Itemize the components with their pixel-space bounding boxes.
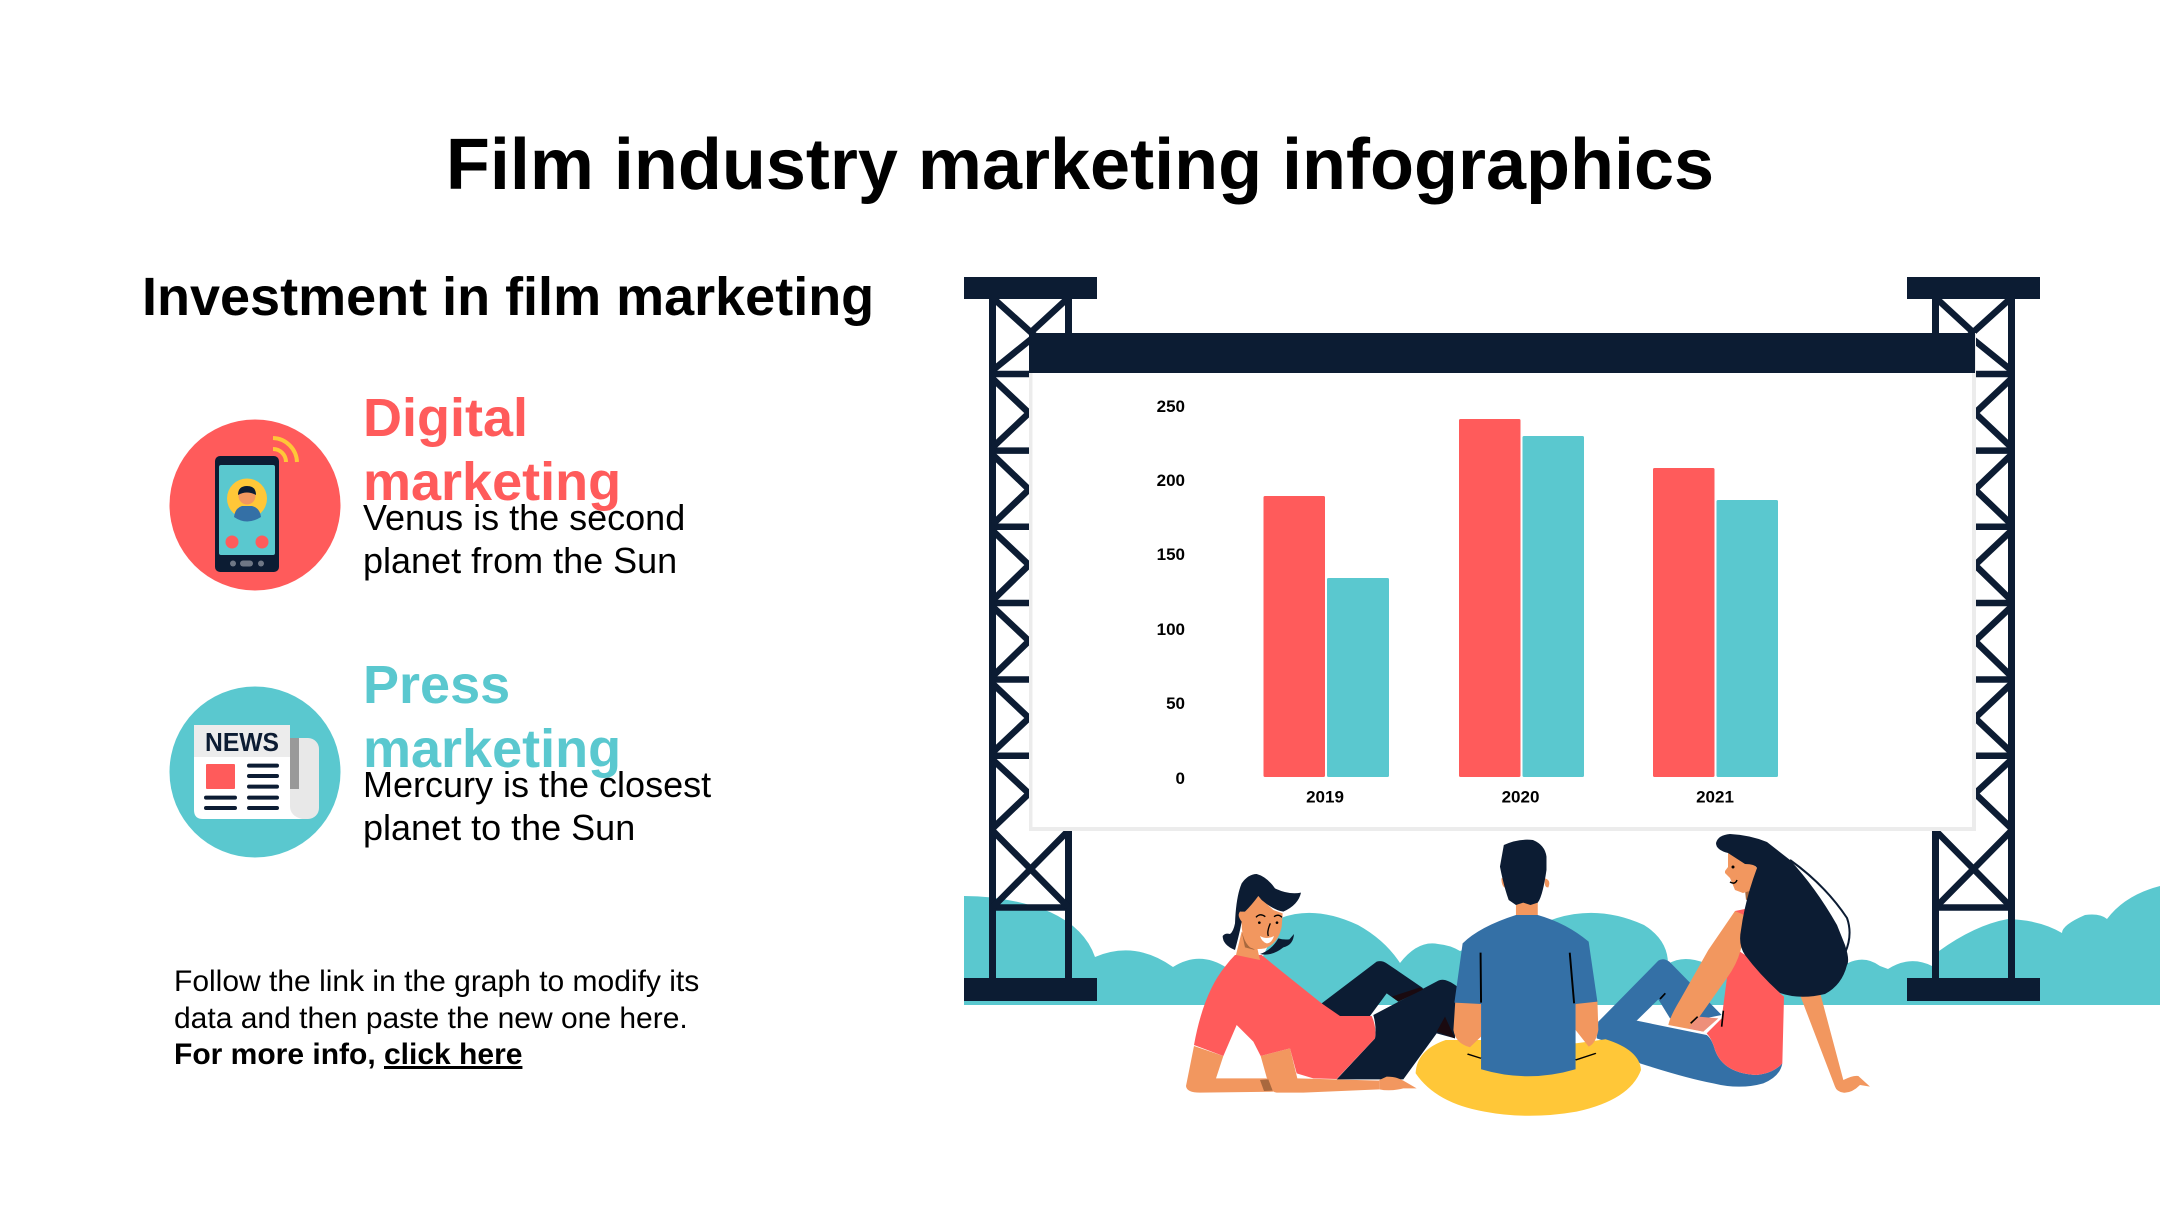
projection screen (1029, 333, 1976, 831)
text block: footer note (174, 965, 699, 1071)
text block: digital marketing (363, 388, 685, 581)
person: woman on right (1597, 834, 1870, 1093)
bars 2020 (1459, 419, 1584, 777)
heading: investment in film marketing: Investment in film marketing (142, 267, 874, 327)
x axis labels: 2019 (1306, 788, 1344, 806)
bar chart (1157, 397, 1778, 806)
y axis labels: 200 (1157, 471, 1185, 490)
y axis labels (1157, 397, 1185, 788)
text block: press marketing (363, 655, 711, 848)
text block: press marketing: marketing (363, 719, 621, 779)
text block: press marketing: Mercury is the closest (363, 764, 711, 805)
y axis labels: 50 (1166, 694, 1185, 713)
person: man on yellow cushion (1416, 840, 1641, 1116)
y axis labels: 250 (1157, 397, 1185, 416)
text block: footer note: Follow the link in the graph to modify its (174, 965, 699, 998)
y axis labels: 100 (1157, 620, 1185, 639)
icon: newspaper in teal circle (170, 686, 340, 858)
text block: digital marketing: marketing (363, 452, 621, 512)
text block: digital marketing: planet from the Sun (363, 540, 677, 581)
text block: digital marketing: Digital (363, 388, 528, 448)
people watching the screen (1186, 834, 1870, 1116)
text block: footer note: For more info, click here (174, 1038, 522, 1071)
y axis labels: 150 (1157, 545, 1185, 564)
icon: phone in red circle (170, 420, 340, 590)
text block: footer note: data and then paste the new one here. (174, 1002, 688, 1035)
bars 2019 (1264, 496, 1389, 777)
x axis labels (1306, 788, 1734, 806)
x axis labels: 2021 (1696, 788, 1734, 806)
title: Film industry marketing infographics (446, 125, 1714, 205)
person: man lying on left (1186, 874, 1457, 1093)
icon: newspaper in teal circle: NEWS (205, 727, 279, 757)
left lighting tower (964, 277, 1097, 1001)
background bushes (964, 886, 2160, 1005)
bars 2021 (1653, 468, 1778, 777)
text block: press marketing: planet to the Sun (363, 807, 635, 848)
x axis labels: 2020 (1502, 788, 1539, 806)
text block: press marketing: Press (363, 655, 510, 715)
text block: digital marketing: Venus is the second (363, 497, 685, 538)
right lighting tower (1907, 277, 2040, 1001)
y axis labels: 0 (1176, 769, 1185, 788)
